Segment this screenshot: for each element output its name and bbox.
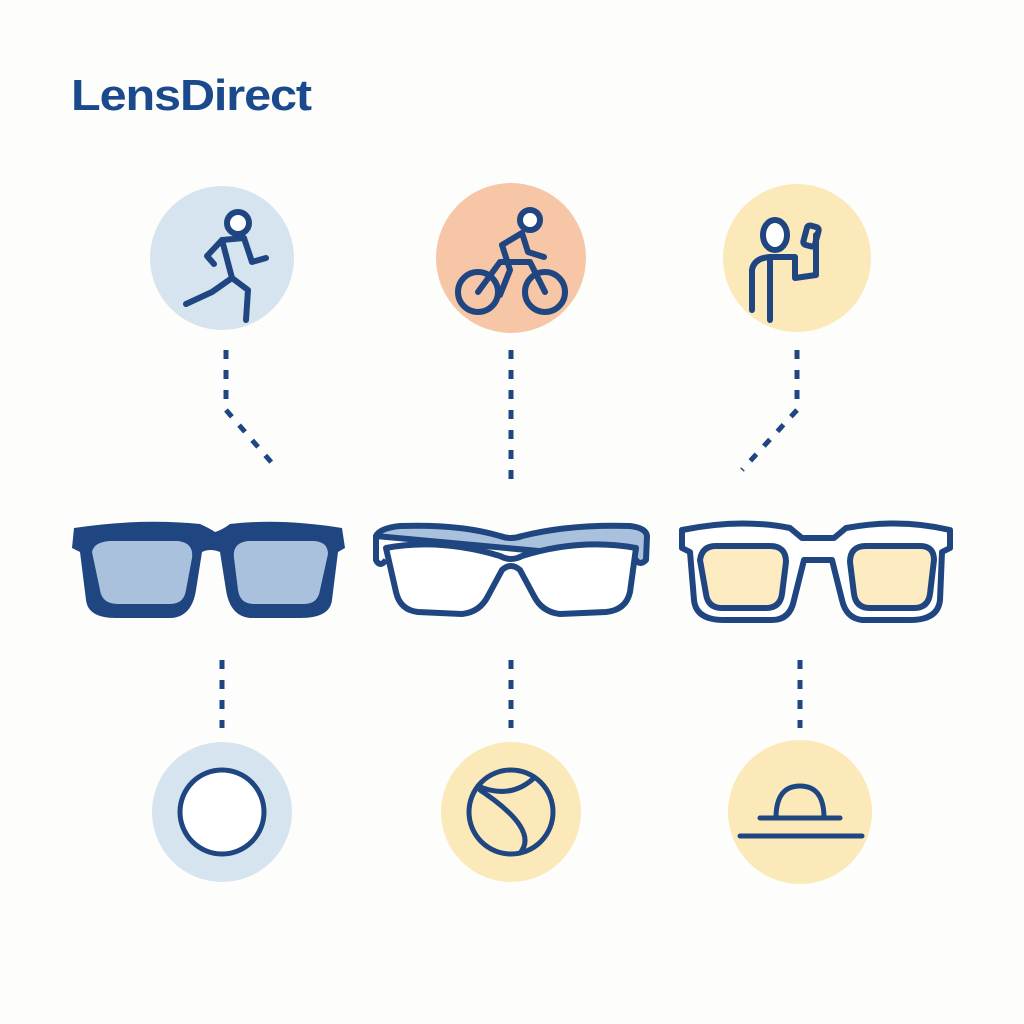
icon: ball bbox=[441, 742, 581, 882]
dashed connector: right bottom bbox=[798, 660, 802, 728]
glasses: double-rim with yellow lenses bbox=[682, 523, 950, 620]
icon: cyclist bbox=[436, 183, 586, 333]
glasses: clear frames with blue brow bbox=[376, 526, 647, 614]
dashed connector: left bottom bbox=[220, 660, 224, 728]
icon: contact lens circle bbox=[152, 742, 292, 882]
dashed connector: middle bottom bbox=[508, 660, 514, 728]
title: LensDirect logo: LensDirect bbox=[71, 71, 312, 120]
icon: person drinking bbox=[723, 184, 871, 332]
dashed connector: left top bbox=[226, 350, 278, 470]
dashed connector: right top bbox=[742, 350, 797, 470]
icon: balance / scale bbox=[728, 740, 872, 884]
glasses: tinted sunglasses bbox=[72, 522, 345, 618]
icon: running person bbox=[150, 186, 294, 330]
dashed connector: middle top bbox=[508, 350, 514, 488]
